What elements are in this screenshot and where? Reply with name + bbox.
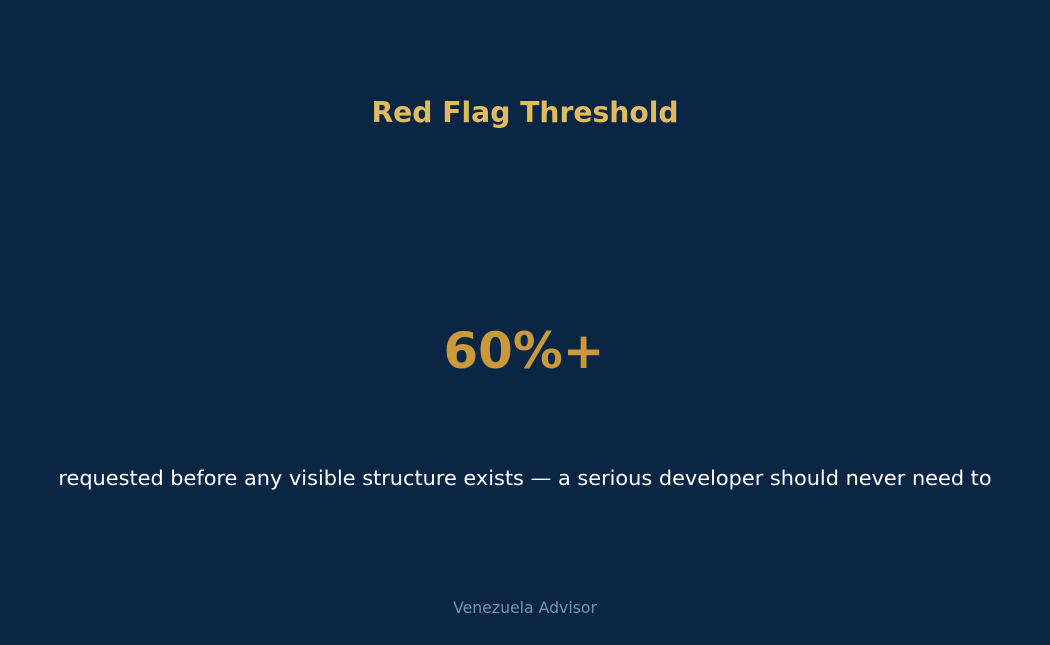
footer source: Venezuela Advisor xyxy=(453,598,597,617)
title: Red Flag Threshold xyxy=(371,96,679,129)
big stat: 60%+: 60%+ xyxy=(444,322,604,380)
description text: requested before any visible structure exists — a serious developer should never need to xyxy=(58,466,992,490)
